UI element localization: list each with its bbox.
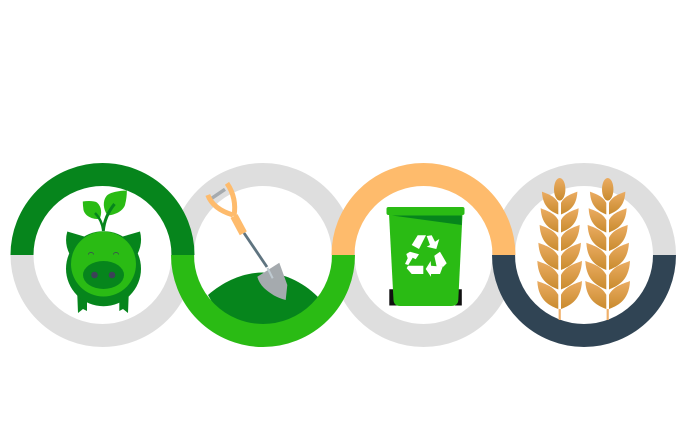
ring: orange top [343, 175, 504, 255]
icon: shovel [208, 183, 287, 300]
coloured ring halves [22, 175, 664, 336]
icon: piggy bank with sprout [66, 190, 141, 313]
ring: dark green top [22, 175, 183, 255]
icon: recycling arrows [405, 235, 447, 277]
grey ring halves [22, 175, 664, 336]
soil mound [208, 272, 318, 335]
ring: navy bottom [504, 255, 664, 336]
wheat stalk right [585, 178, 630, 320]
icon: wheat stalks [537, 178, 630, 320]
icon: recycling bin [386, 207, 464, 306]
wheat stalk left [537, 178, 582, 320]
ring: bright green bottom [182, 255, 344, 336]
